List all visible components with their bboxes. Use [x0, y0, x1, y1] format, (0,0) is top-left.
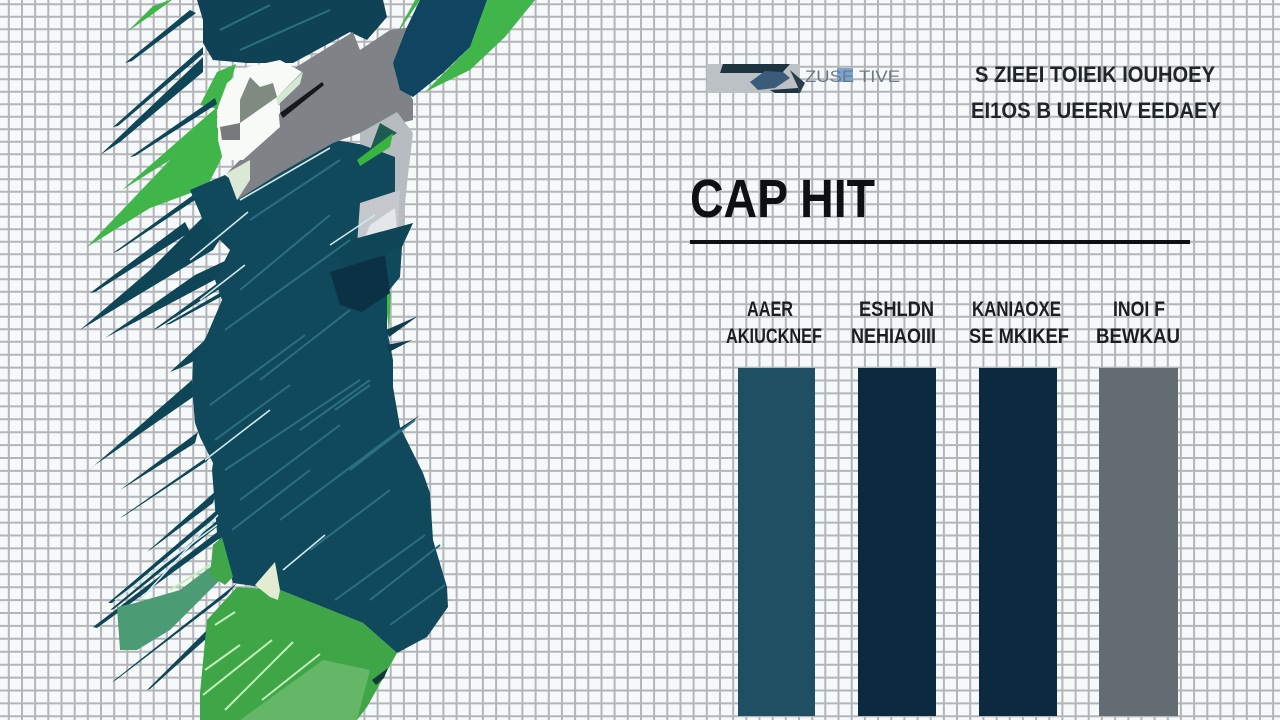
logo mark — [707, 64, 900, 93]
player body — [190, 140, 448, 653]
header text: S ZIEEI TOIEIK IOUHOEY — [975, 62, 1215, 87]
column labels: AKIUCKNEF — [726, 325, 822, 348]
pale patch at waist — [255, 562, 280, 600]
title rule — [690, 240, 1190, 244]
header text: EI1OS B UEERIV EEDAEY — [971, 98, 1221, 123]
column labels: NEHIAOIII — [851, 325, 936, 348]
column labels: SE MKIKEF — [969, 325, 1069, 348]
column labels: KANIAOXE — [972, 298, 1061, 321]
teal-green blob at lower left — [117, 565, 225, 650]
pale streaks — [115, 148, 375, 600]
column chart — [726, 298, 1180, 716]
body highlight streaks — [210, 5, 445, 625]
black slit on jersey — [280, 82, 324, 118]
bars — [738, 368, 1178, 716]
green wedge beside the body — [210, 537, 233, 585]
lighter green patch — [240, 660, 370, 720]
pale green streaks — [170, 565, 320, 710]
column labels: AAER — [747, 298, 793, 321]
dark helmet top right — [393, 0, 487, 97]
column labels: ESHLDN — [859, 298, 934, 321]
dark spikes on the left edge — [80, 10, 237, 690]
illustration: abstract football player brushstrokes — [80, 0, 535, 720]
spikes on right edge — [386, 316, 420, 430]
white helmet — [218, 60, 303, 200]
title: CAP HIT — [690, 169, 875, 229]
logo text: ZUSE TIVE — [805, 67, 900, 86]
column labels: BEWKAU — [1096, 325, 1180, 348]
dark shadow patch — [330, 255, 390, 312]
right white jersey number — [332, 112, 413, 272]
green streaks behind the player — [87, 0, 535, 332]
grey jersey band — [227, 27, 413, 200]
column labels: INOI F — [1113, 298, 1165, 321]
bottom green shorts — [200, 587, 397, 720]
column labels — [726, 298, 1180, 348]
top dark shoulder shape — [197, 0, 387, 63]
header text — [971, 62, 1221, 123]
small dark mark lower right — [372, 668, 388, 685]
